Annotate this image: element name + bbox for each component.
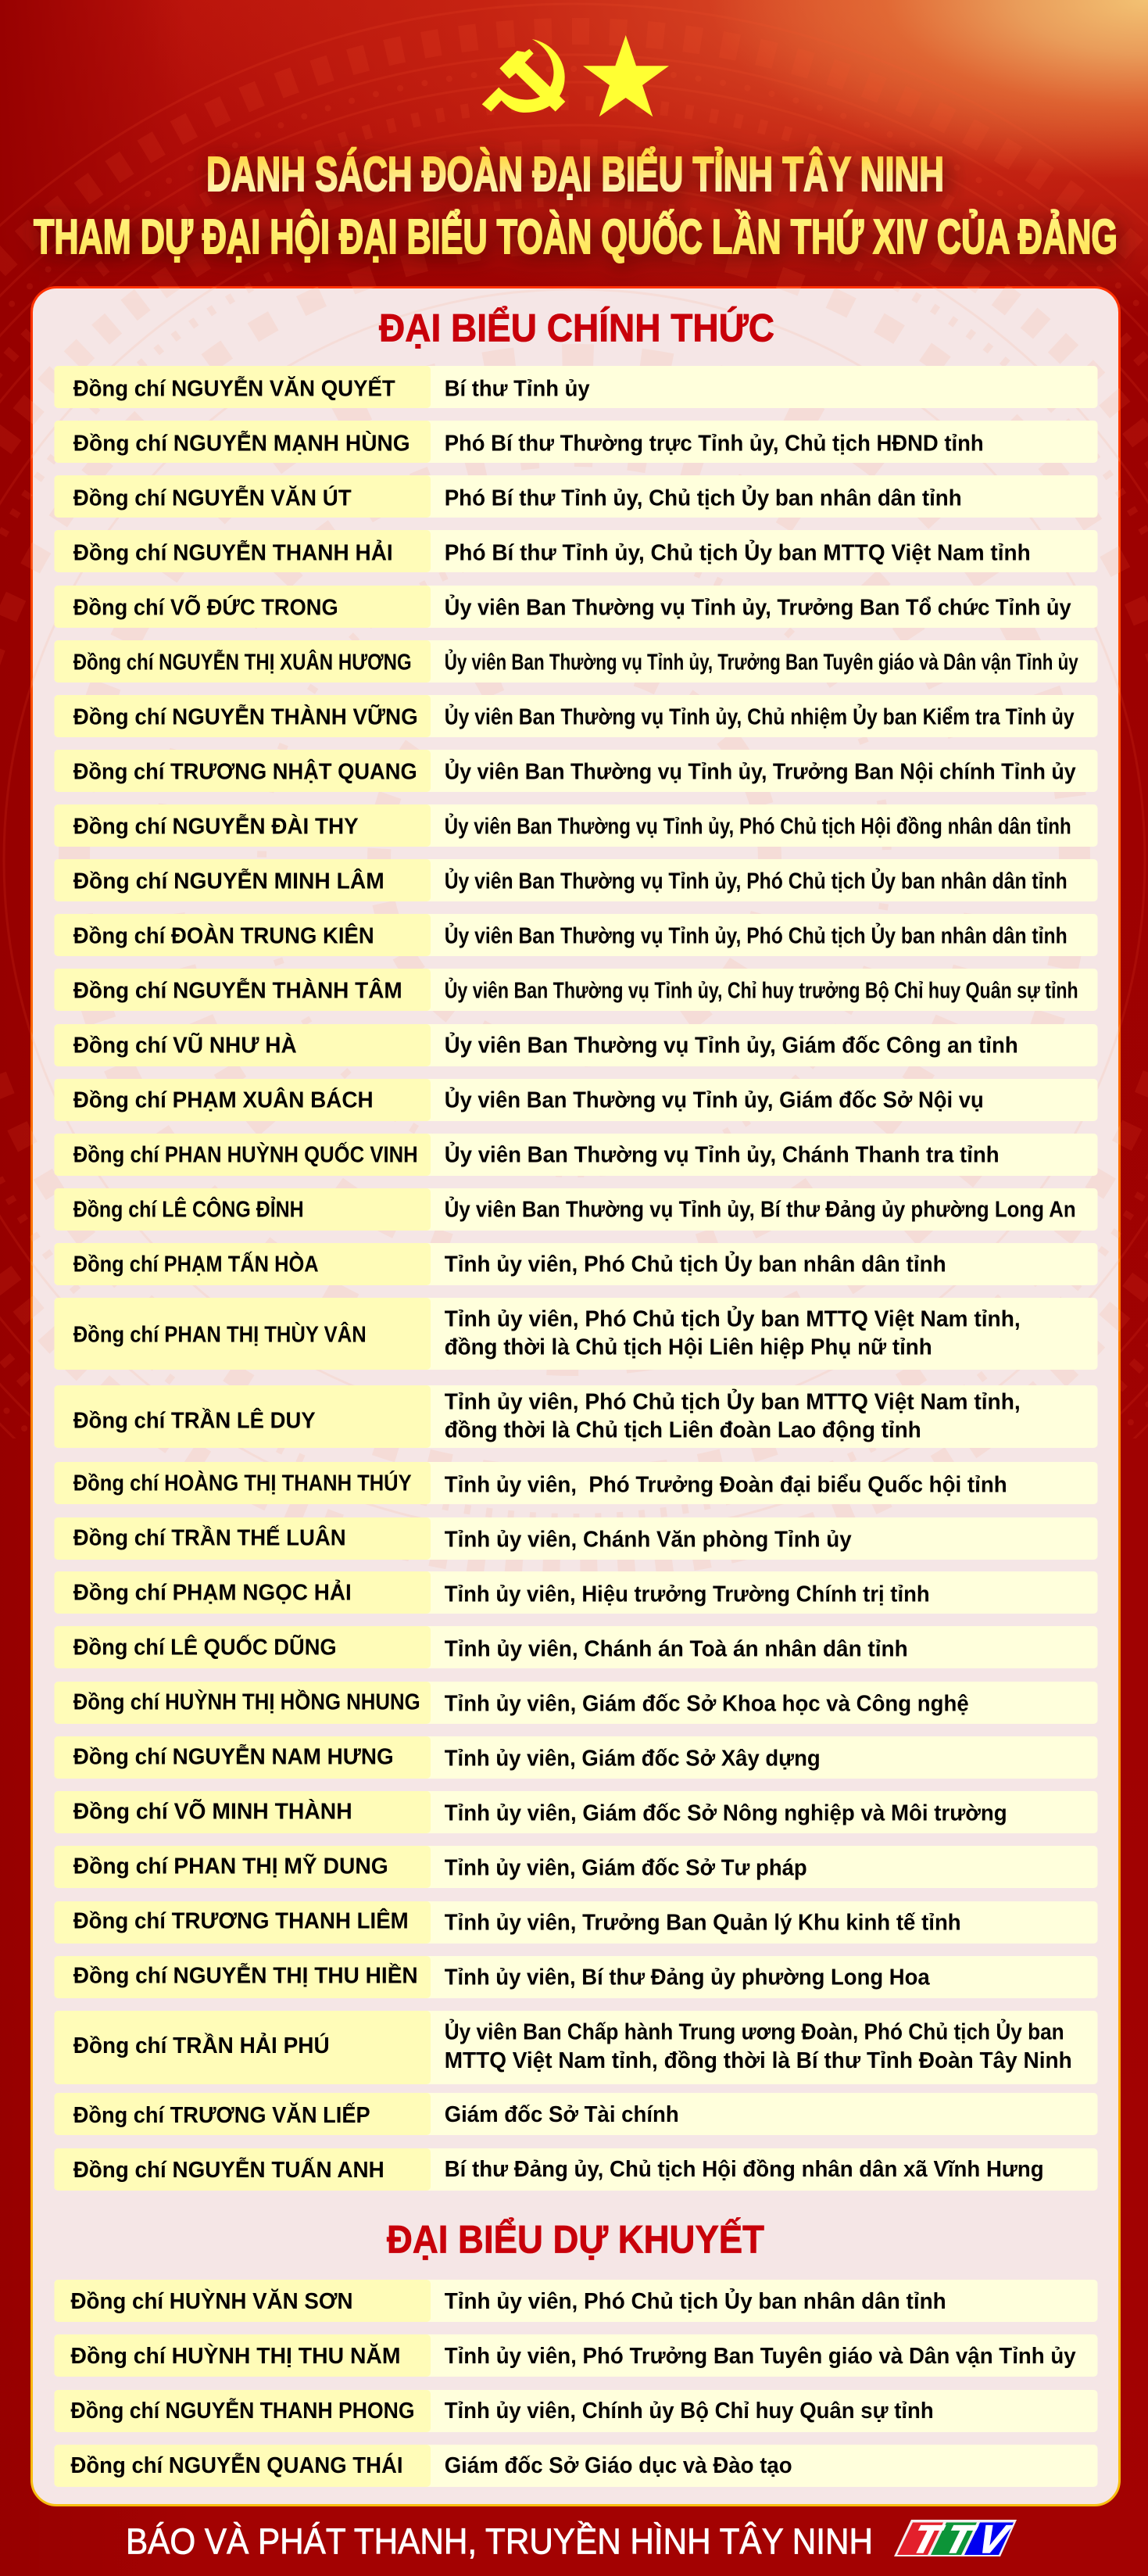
- row 22: [55, 1571, 1097, 1614]
- row 12: [55, 969, 1097, 1011]
- footer text: BÁO VÀ PHÁT THANH, TRUYỀN HÌNH TÂY NINH: [126, 2521, 873, 2562]
- row 9: [55, 804, 1097, 847]
- row 5: [55, 586, 1097, 628]
- row 31: Đồng chí TRƯƠNG VĂN LIẾP: [73, 2101, 370, 2128]
- row 25: Đồng chí NGUYỄN NAM HƯNG: [73, 1743, 394, 1770]
- row 8: Đồng chí TRƯƠNG NHẬT QUANG: [73, 758, 417, 785]
- row 24: [55, 1682, 1097, 1724]
- row 2: Đồng chí NGUYỄN MẠNH HÙNG: [73, 430, 410, 457]
- row 26: [55, 1791, 1097, 1833]
- row 30: [55, 2011, 1097, 2084]
- row 15: Đồng chí PHAN HUỲNH QUỐC VINH: [73, 1141, 418, 1168]
- alternate row 3: Tỉnh ủy viên, Chính ủy Bộ Chỉ huy Quân sự tỉnh: [445, 2399, 934, 2424]
- row 20: Tỉnh ủy viên, Phó Trưởng Đoàn đại biểu Quốc hội tỉnh: [445, 1473, 1007, 1498]
- alternate row 3: Đồng chí NGUYỄN THANH PHONG: [70, 2397, 414, 2424]
- row 13: Đồng chí VŨ NHƯ HÀ: [73, 1032, 297, 1059]
- row 32: Đồng chí NGUYỄN TUẤN ANH: [73, 2156, 384, 2183]
- row 20: Đồng chí HOÀNG THỊ THANH THÚY: [73, 1470, 412, 1496]
- logo: TTV: T: [940, 2517, 981, 2561]
- row 32: [55, 2148, 1097, 2191]
- row 28: Đồng chí TRƯƠNG THANH LIÊM: [73, 1908, 409, 1934]
- alternate row 2: Tỉnh ủy viên, Phó Trưởng Ban Tuyên giáo và Dân vận Tỉnh ủy: [445, 2344, 1076, 2369]
- row 18: đồng thời là Chủ tịch Hội Liên hiệp Phụ nữ tỉnh: [445, 1335, 932, 1360]
- row 17: Đồng chí PHẠM TẤN HÒA: [73, 1251, 319, 1277]
- row 24: Đồng chí HUỲNH THỊ HỒNG NHUNG: [73, 1689, 420, 1715]
- row 3: Phó Bí thư Tỉnh ủy, Chủ tịch Ủy ban nhân dân tỉnh: [445, 485, 962, 511]
- row 13: [55, 1024, 1097, 1066]
- row 25: [55, 1736, 1097, 1779]
- row 27: Đồng chí PHAN THỊ MỸ DUNG: [73, 1853, 388, 1879]
- row 7: [55, 695, 1097, 737]
- row 30: Ủy viên Ban Chấp hành Trung ương Đoàn, Phó Chủ tịch Ủy ban: [445, 2018, 1064, 2044]
- row 16: [55, 1188, 1097, 1231]
- row 30: Đồng chí TRẦN HẢI PHÚ: [73, 2032, 330, 2058]
- heading: official delegates: ĐẠI BIỂU CHÍNH THỨC: [379, 306, 774, 350]
- row 28: Tỉnh ủy viên, Trưởng Ban Quản lý Khu kinh tế tỉnh: [445, 1911, 961, 1936]
- row 31: [55, 2093, 1097, 2135]
- row 9: Đồng chí NGUYỄN ĐÀI THY: [73, 813, 359, 840]
- row 6: Đồng chí NGUYỄN THỊ XUÂN HƯƠNG: [73, 649, 412, 675]
- row 29: Tỉnh ủy viên, Bí thư Đảng ủy phường Long Hoa: [445, 1965, 931, 1990]
- row 19: đồng thời là Chủ tịch Liên đoàn Lao động tỉnh: [445, 1418, 921, 1443]
- row 5: Đồng chí VÕ ĐỨC TRONG: [73, 594, 338, 621]
- row 10: Đồng chí NGUYỄN MINH LÂM: [73, 868, 384, 894]
- row 24: Tỉnh ủy viên, Giám đốc Sở Khoa học và Công nghệ: [445, 1692, 969, 1717]
- row 22: Đồng chí PHẠM NGỌC HẢI: [73, 1579, 352, 1606]
- background drum pattern: [0, 35, 1148, 1438]
- panel drum pattern: [31, 287, 1120, 1571]
- alternate row 4: [55, 2445, 1097, 2487]
- row 8: [55, 750, 1097, 792]
- row 1: Bí thư Tỉnh ủy: [445, 377, 590, 402]
- row 10: [55, 859, 1097, 901]
- row 4: Phó Bí thư Tỉnh ủy, Chủ tịch Ủy ban MTTQ Việt Nam tỉnh: [445, 539, 1031, 566]
- row 27: Tỉnh ủy viên, Giám đốc Sở Tư pháp: [445, 1856, 807, 1881]
- row 18: Tỉnh ủy viên, Phó Chủ tịch Ủy ban MTTQ Việt Nam tỉnh,: [445, 1306, 1021, 1332]
- row 16: Ủy viên Ban Thường vụ Tỉnh ủy, Bí thư Đảng ủy phường Long An: [445, 1196, 1076, 1223]
- row 12: Đồng chí NGUYỄN THÀNH TÂM: [73, 977, 402, 1004]
- row 21: [55, 1517, 1097, 1560]
- row 18: Đồng chí PHAN THỊ THÙY VÂN: [73, 1321, 367, 1348]
- row 29: Đồng chí NGUYỄN THỊ THU HIỀN: [73, 1962, 418, 1989]
- title: [34, 148, 1118, 264]
- emblem: star: [583, 35, 669, 116]
- alternate row 2: [55, 2334, 1097, 2377]
- row 21: Đồng chí TRẦN THẾ LUÂN: [73, 1524, 346, 1551]
- row 14: [55, 1079, 1097, 1121]
- row 26: Tỉnh ủy viên, Giám đốc Sở Nông nghiệp và Môi trường: [445, 1801, 1007, 1826]
- heading: alternate delegates: ĐẠI BIỂU DỰ KHUYẾT: [387, 2218, 764, 2262]
- alternate row 4: Giám đốc Sở Giáo dục và Đào tạo: [445, 2453, 792, 2478]
- logo: TTV: V: [973, 2517, 1015, 2561]
- alternate row 3: [55, 2390, 1097, 2432]
- row 25: Tỉnh ủy viên, Giám đốc Sở Xây dựng: [445, 1747, 821, 1772]
- row 13: Ủy viên Ban Thường vụ Tỉnh ủy, Giám đốc Công an tỉnh: [445, 1032, 1018, 1059]
- row 19: Tỉnh ủy viên, Phó Chủ tịch Ủy ban MTTQ Việt Nam tỉnh,: [445, 1388, 1021, 1415]
- row 1: [55, 366, 1097, 408]
- row 22: Tỉnh ủy viên, Hiệu trưởng Trường Chính trị tỉnh: [445, 1582, 930, 1607]
- row 23: Tỉnh ủy viên, Chánh án Toà án nhân dân tỉnh: [445, 1637, 908, 1662]
- row 17: Tỉnh ủy viên, Phó Chủ tịch Ủy ban nhân dân tỉnh: [445, 1251, 946, 1277]
- alternate row 1: [55, 2280, 1097, 2322]
- row 15: Ủy viên Ban Thường vụ Tỉnh ủy, Chánh Thanh tra tỉnh: [445, 1141, 1000, 1168]
- row 28: [55, 1901, 1097, 1944]
- row 21: Tỉnh ủy viên, Chánh Văn phòng Tỉnh ủy: [445, 1528, 852, 1553]
- row 27: [55, 1846, 1097, 1888]
- row 23: Đồng chí LÊ QUỐC DŨNG: [73, 1634, 337, 1661]
- row 3: [55, 475, 1097, 518]
- row 4: [55, 530, 1097, 572]
- logo: TTV: [894, 2517, 1017, 2561]
- alternate row 4: Đồng chí NGUYỄN QUANG THÁI: [70, 2452, 403, 2478]
- row 15: [55, 1134, 1097, 1176]
- row 16: Đồng chí LÊ CÔNG ĐỈNH: [73, 1196, 304, 1223]
- row 14: Ủy viên Ban Thường vụ Tỉnh ủy, Giám đốc Sở Nội vụ: [445, 1087, 984, 1113]
- logo: TTV: T: [907, 2517, 948, 2561]
- row 30: MTTQ Việt Nam tỉnh, đồng thời là Bí thư Tỉnh Đoàn Tây Ninh: [445, 2048, 1072, 2073]
- row 32: Bí thư Đảng ủy, Chủ tịch Hội đồng nhân dân xã Vĩnh Hưng: [445, 2157, 1044, 2182]
- row 26: Đồng chí VÕ MINH THÀNH: [73, 1798, 352, 1825]
- row 4: Đồng chí NGUYỄN THANH HẢI: [73, 539, 393, 566]
- row 2: Phó Bí thư Thường trực Tỉnh ủy, Chủ tịch HĐND tỉnh: [445, 432, 984, 457]
- row 1: Đồng chí NGUYỄN VĂN QUYẾT: [73, 375, 395, 402]
- row 11: Đồng chí ĐOÀN TRUNG KIÊN: [73, 923, 374, 949]
- row 6: [55, 640, 1097, 683]
- row 2: [55, 421, 1097, 463]
- row 31: Giám đốc Sở Tài chính: [445, 2102, 679, 2127]
- row 23: [55, 1626, 1097, 1668]
- alternate row 2: Đồng chí HUỲNH THỊ THU NĂM: [70, 2342, 400, 2369]
- row 20: [55, 1462, 1097, 1504]
- row 3: Đồng chí NGUYỄN VĂN ÚT: [73, 485, 352, 511]
- row 18: [55, 1298, 1097, 1370]
- row 11: [55, 914, 1097, 956]
- row 19: [55, 1385, 1097, 1448]
- alternate row 1: Đồng chí HUỲNH VĂN SƠN: [70, 2288, 353, 2314]
- row 17: [55, 1243, 1097, 1285]
- row 29: [55, 1956, 1097, 1998]
- row 14: Đồng chí PHẠM XUÂN BÁCH: [73, 1087, 374, 1113]
- row 7: Đồng chí NGUYỄN THÀNH VỮNG: [73, 704, 418, 730]
- row 19: Đồng chí TRẦN LÊ DUY: [73, 1407, 316, 1434]
- row 8: Ủy viên Ban Thường vụ Tỉnh ủy, Trưởng Ban Nội chính Tỉnh ủy: [445, 758, 1076, 785]
- emblem: hammer and sickle: [482, 39, 565, 113]
- alternate row 1: Tỉnh ủy viên, Phó Chủ tịch Ủy ban nhân dân tỉnh: [445, 2288, 946, 2314]
- row 5: Ủy viên Ban Thường vụ Tỉnh ủy, Trưởng Ban Tổ chức Tỉnh ủy: [445, 594, 1071, 621]
